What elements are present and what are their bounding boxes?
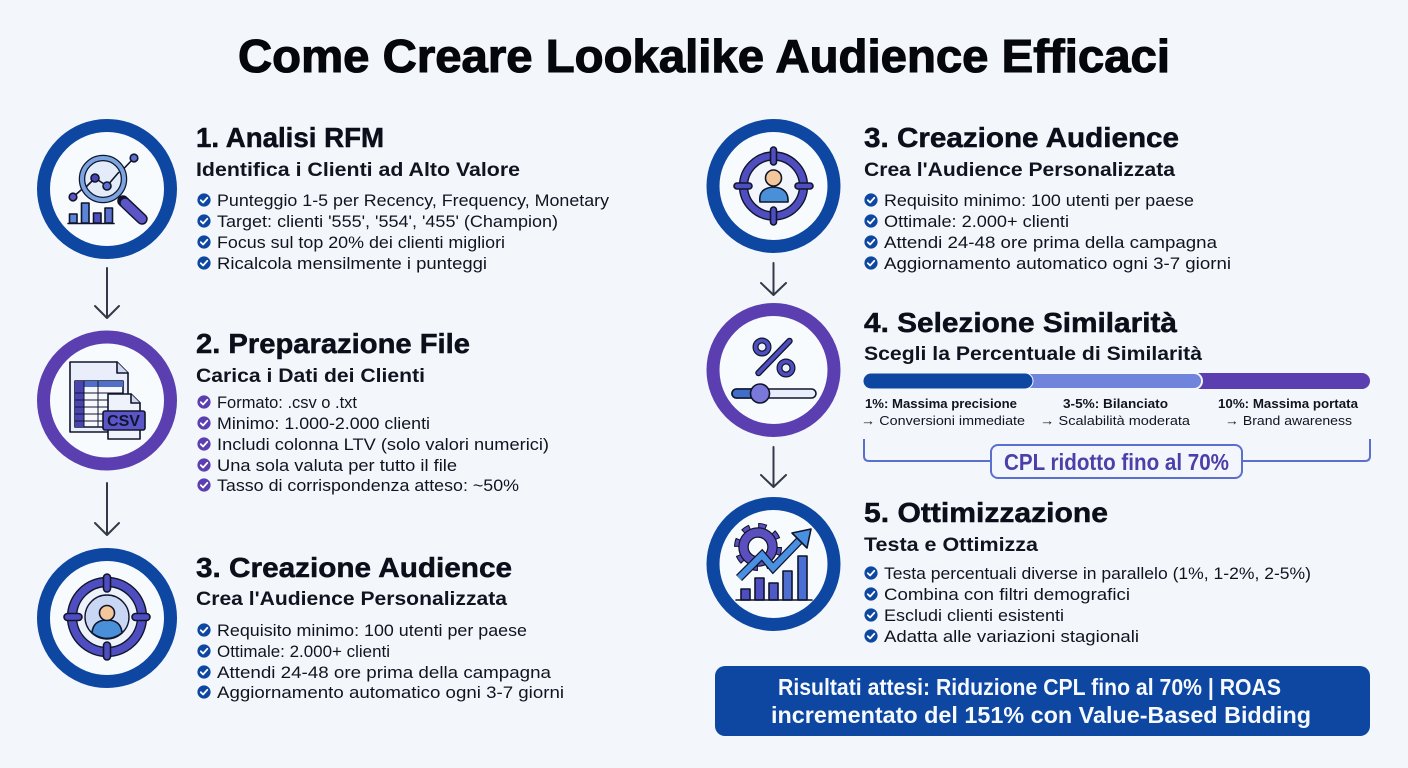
scale label: 10% [1218, 396, 1359, 428]
icon: percent and slider [713, 310, 834, 430]
icon: CSV file: CSV [107, 413, 140, 430]
panel: step 2 preparazione file [44, 328, 549, 495]
subheading: Scegli la Percentuale di Similarità [864, 343, 1202, 365]
heading: 4. Selezione Similarita: 4. Selezione Similarità [864, 307, 1177, 338]
subheading: Crea l'Audience Personalizzata [196, 588, 507, 610]
heading: 1. Analisi RFM: 1. Analisi RFM [196, 122, 384, 153]
bracket callout: CPL ridotto [864, 439, 1370, 478]
bullet list: Ottimale: 2.000+ clienti [884, 212, 1069, 231]
scale label: 10%: 10%: Massima portata [1218, 396, 1359, 411]
bullet list: Punteggio 1-5 per Recency, Frequency, Monetary [217, 191, 610, 210]
arrow: step 2 to 3 [95, 483, 119, 535]
bullet list [197, 621, 564, 702]
panel: step 3 creazione audience (left) [44, 552, 564, 702]
bullet list: Requisito minimo: 100 utenti per paese [217, 621, 527, 640]
bullet list: Includi colonna LTV (solo valori numerici) [217, 435, 549, 454]
bullet list: Aggiornamento automatico ogni 3-7 giorni [884, 254, 1231, 273]
subheading: Testa e Ottimizza [864, 534, 1038, 556]
heading: 3. Creazione Audience: 3. Creazione Audience [196, 552, 512, 583]
bullet list [197, 191, 610, 273]
heading: 3. Creazione Audience: 3. Creazione Audience [864, 122, 1179, 153]
icon: target with person [44, 554, 170, 682]
bullet list: Ottimale: 2.000+ clienti [217, 642, 390, 661]
bullet list: Una sola valuta per tutto il file [217, 456, 457, 475]
arrow: right step 3 to 4 [761, 263, 786, 295]
bullet list: Adatta alle variazioni stagionali [884, 627, 1139, 646]
arrow: step 1 to 2 [95, 268, 119, 318]
subheading: Identifica i Clienti ad Alto Valore [196, 159, 520, 181]
bracket callout: CPL ridotto: CPL ridotto fino al 70% [1004, 449, 1229, 475]
scale label: 3-5% [1040, 396, 1191, 428]
panel: step 3 creazione audience (right) [713, 122, 1231, 273]
scale label: 10%: → Brand awareness [1225, 413, 1353, 428]
bullet list [864, 191, 1231, 273]
bullet list: Tasso di corrispondenza atteso: ~50% [217, 476, 519, 495]
bullet list: Attendi 24-48 ore prima della campagna [884, 233, 1218, 252]
panel: step 5 ottimizzazione [713, 497, 1311, 646]
bullet list [197, 393, 549, 495]
similarity scale bar [863, 373, 1370, 389]
scale label: 1%: 1%: Massima precisione [865, 396, 1017, 411]
bullet list: Minimo: 1.000-2.000 clienti [217, 414, 430, 433]
icon: magnifier with chart [44, 126, 170, 252]
panel: step 1 analisi RFM [44, 122, 610, 273]
results banner [715, 666, 1370, 736]
scale label: 3-5%: → Scalabilità moderata [1040, 413, 1191, 428]
heading: 5. Ottimizzazione: 5. Ottimizzazione [864, 497, 1108, 528]
results banner: Risultati attesi: Riduzione CPL fino al 70% | ROAS [778, 674, 1281, 700]
icon: target with person [713, 126, 834, 246]
scale label: 1% [861, 396, 1025, 428]
bullet list: Attendi 24-48 ore prima della campagna [217, 663, 552, 682]
scale label: 3-5%: 3-5%: Bilanciato [1063, 396, 1168, 411]
subheading: Carica i Dati dei Clienti [196, 365, 425, 387]
title: Come Creare Lookalike Audience Efficaci [238, 30, 1170, 82]
bullet list: Escludi clienti esistenti [884, 606, 1064, 625]
bullet list: Aggiornamento automatico ogni 3-7 giorni [217, 683, 564, 702]
heading: 2. Preparazione File: 2. Preparazione File [196, 328, 470, 359]
arrow: step 4 to 5 [761, 447, 786, 487]
bullet list: Formato: .csv o .txt [217, 393, 357, 412]
bullet list: Target: clienti '555', '554', '455' (Champion) [217, 212, 558, 231]
bullet list: Requisito minimo: 100 utenti per paese [884, 191, 1194, 210]
scale label: 1%: → Conversioni immediate [861, 413, 1025, 428]
bullet list: Testa percentuali diverse in parallelo (1%, 1-2%, 2-5%) [884, 564, 1311, 583]
icon: CSV file [44, 337, 170, 464]
bullet list: Focus sul top 20% dei clienti migliori [217, 233, 505, 252]
bullet list: Ricalcola mensilmente i punteggi [217, 254, 487, 273]
results banner: incrementato del 151% con Value-Based Bidding [771, 702, 1311, 728]
subheading: Crea l'Audience Personalizzata [864, 159, 1175, 181]
bullet list [864, 564, 1311, 646]
bullet list: Combina con filtri demografici [884, 585, 1130, 604]
panel: step 4 selezione similarita [713, 307, 1370, 478]
icon: gear, growth arrow and bars [713, 504, 834, 624]
